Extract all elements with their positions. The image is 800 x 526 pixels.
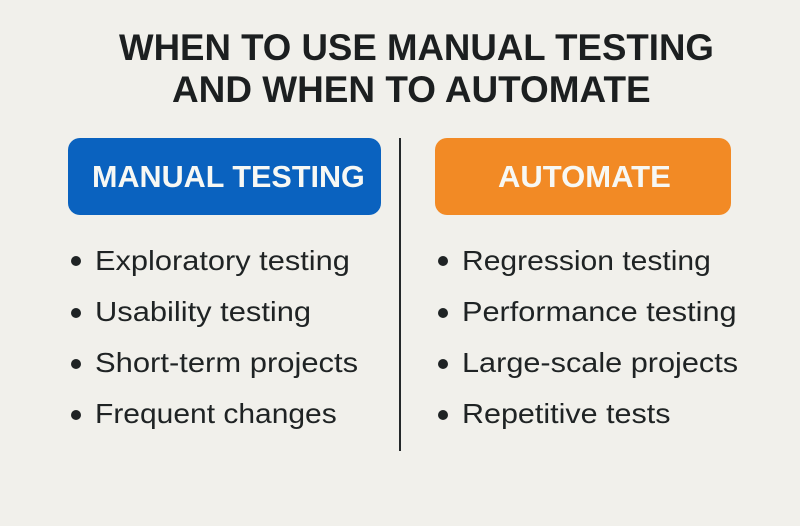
- list: automate uses: Repetitive tests: [462, 398, 670, 429]
- list: manual testing uses: Frequent changes: [95, 398, 337, 429]
- panel: automate header: AUTOMATE: [498, 159, 671, 194]
- title: [119, 27, 714, 110]
- list: manual testing uses: Usability testing: [95, 296, 311, 327]
- list: automate uses: Large-scale projects: [462, 347, 738, 378]
- title: WHEN TO USE MANUAL TESTING: [119, 27, 714, 68]
- panel: manual testing header: [68, 138, 381, 215]
- list: automate uses: Regression testing: [462, 245, 710, 276]
- list: manual testing uses: Short-term projects: [95, 347, 358, 378]
- list: manual testing uses: [71, 245, 358, 429]
- list: automate uses: [438, 245, 738, 429]
- list: manual testing uses: Exploratory testing: [95, 245, 350, 276]
- panel: automate header: [435, 138, 731, 215]
- panel: manual testing header: MANUAL TESTING: [92, 159, 365, 194]
- title: AND WHEN TO AUTOMATE: [172, 69, 651, 110]
- center divider line: [399, 138, 401, 451]
- list: automate uses: Performance testing: [462, 296, 736, 327]
